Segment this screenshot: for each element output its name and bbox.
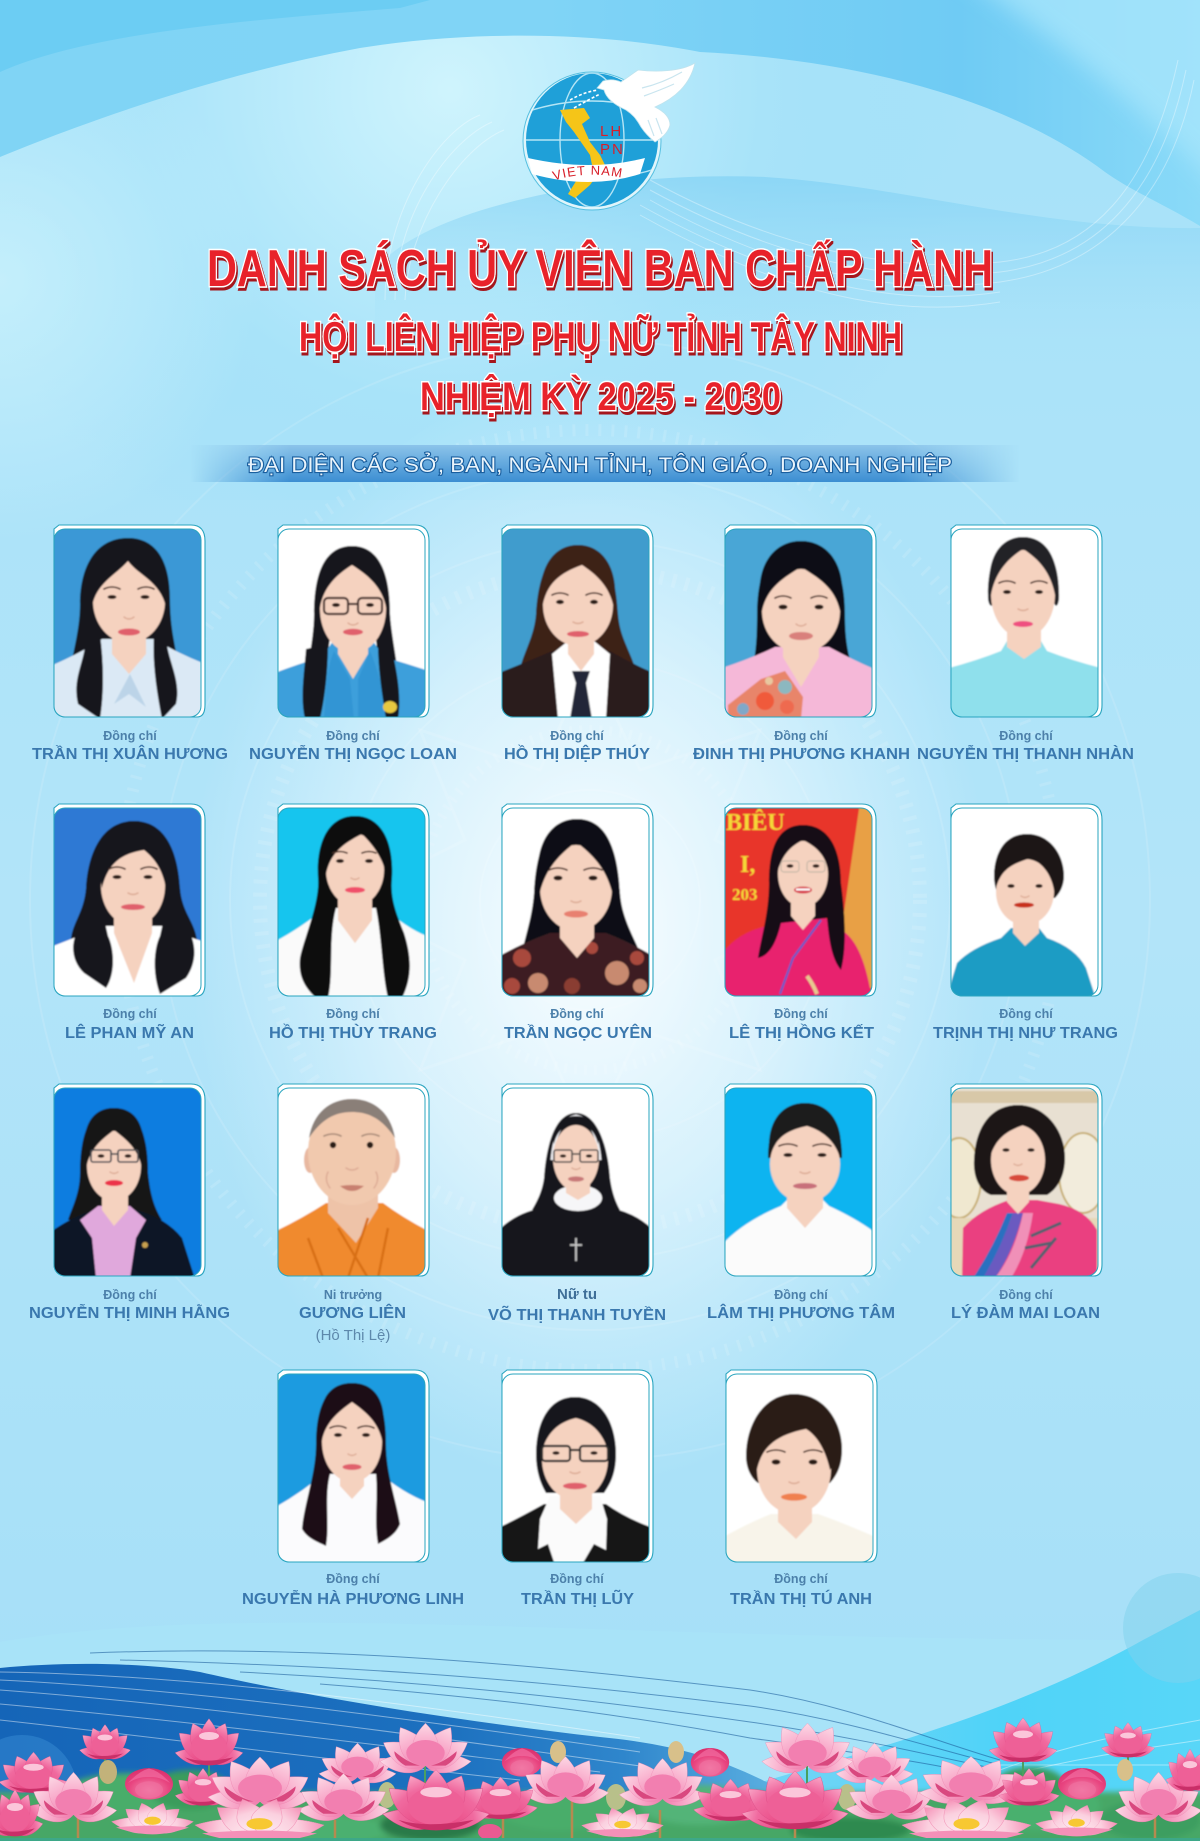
caption: Đồng chí (326, 1007, 380, 1021)
title line 3: NHIỆM KỲ 2025 - 2030 (420, 373, 781, 419)
card: Hồ Thị Thùy Trang (269, 802, 437, 1042)
card: Hồ Thị Diệp Thúy (496, 523, 656, 763)
caption (504, 1007, 652, 1042)
photo (496, 1082, 656, 1282)
caption (488, 1286, 666, 1324)
caption: Đồng chí (326, 729, 380, 743)
photo (48, 802, 208, 1002)
photo (720, 1368, 880, 1568)
card: Nguyễn Hà Phương Linh (242, 1368, 464, 1608)
caption: LÂM THỊ PHƯƠNG TÂM (707, 1303, 895, 1322)
card: Nguyễn Thị Minh Hằng (29, 1082, 230, 1322)
caption: HỒ THỊ THÙY TRANG (269, 1023, 437, 1042)
caption: Đồng chí (999, 1007, 1053, 1021)
caption: LÊ THỊ HỒNG KẾT (729, 1023, 874, 1042)
caption: Đồng chí (550, 1572, 604, 1586)
caption: GƯƠNG LIÊN (299, 1303, 406, 1322)
photo (945, 802, 1105, 1002)
caption (693, 729, 910, 763)
caption (32, 729, 228, 763)
card: Trần Thị Xuân Hương (32, 523, 228, 763)
caption: Đồng chí (774, 1288, 828, 1302)
caption (730, 1572, 872, 1608)
caption (933, 1007, 1118, 1042)
photo (272, 523, 432, 723)
caption: NGUYỄN THỊ THANH NHÀN (917, 744, 1134, 763)
letters LHPN (600, 123, 625, 158)
title line 2: HỘI LIÊN HIỆP PHỤ NỮ TỈNH TÂY NINH (299, 312, 902, 360)
caption (951, 1288, 1100, 1322)
caption: HỒ THỊ DIỆP THÚY (504, 744, 650, 763)
caption: Đồng chí (999, 1288, 1053, 1302)
logo: Vietnam Women's Union emblem: VIET NAM (552, 166, 622, 180)
photo: BIÊU (726, 809, 785, 836)
photo (48, 1082, 208, 1282)
caption: Ni trưởng (324, 1288, 382, 1302)
caption: Đồng chí (326, 1572, 380, 1586)
caption: TRỊNH THỊ NHƯ TRANG (933, 1025, 1118, 1042)
caption: NGUYỄN THỊ NGỌC LOAN (249, 744, 457, 763)
bottom wave decoration (0, 1573, 1200, 1841)
card: Trần Thị Tú Anh (720, 1368, 880, 1608)
card: Đinh Thị Phương Khanh (693, 523, 910, 763)
ribbon (528, 158, 645, 182)
card: Lê Thị Hồng Kết (719, 802, 879, 1042)
caption: LÊ PHAN MỸ AN (65, 1022, 194, 1042)
caption: Đồng chí (774, 1572, 828, 1586)
caption: Đồng chí (999, 729, 1053, 743)
caption: Đồng chí (774, 1007, 828, 1021)
caption (269, 1007, 437, 1042)
caption: NGUYỄN HÀ PHƯƠNG LINH (242, 1589, 464, 1608)
title line 1: DANH SÁCH ỦY VIÊN BAN CHẤP HÀNH (207, 239, 993, 298)
caption (65, 1007, 194, 1042)
caption: Nữ tu (557, 1286, 597, 1303)
caption: LÝ ĐÀM MAI LOAN (951, 1303, 1100, 1322)
caption (917, 729, 1134, 763)
caption: TRẦN THỊ LŨY (521, 1588, 634, 1608)
photo (719, 1082, 879, 1282)
caption (707, 1288, 895, 1322)
lotus flowers and leaves (0, 1718, 1200, 1841)
photo (272, 1368, 432, 1568)
photo (496, 523, 656, 723)
caption (504, 729, 650, 763)
caption: TRẦN THỊ TÚ ANH (730, 1589, 872, 1608)
photo (945, 523, 1105, 723)
photo: I, (740, 852, 755, 878)
photo (496, 1368, 656, 1568)
caption: Đồng chí (550, 1007, 604, 1021)
caption: Đồng chí (103, 729, 157, 743)
caption: ĐINH THỊ PHƯƠNG KHANH (693, 746, 910, 763)
letters LHPN: LH (600, 123, 623, 140)
photo (272, 1082, 432, 1282)
caption (299, 1288, 406, 1344)
card: Nữ tu Võ Thị Thanh Tuyền (488, 1082, 666, 1324)
caption: Đồng chí (774, 729, 828, 743)
card: Lý Đàm Mai Loan (950, 1084, 1103, 1318)
photo: 203 (732, 885, 758, 904)
card: Nguyễn Thị Thanh Nhàn (917, 523, 1134, 763)
section banner (190, 445, 1020, 482)
caption: Đồng chí (550, 729, 604, 743)
caption: TRẦN THỊ XUÂN HƯƠNG (32, 744, 228, 763)
card: Lâm Thị Phương Tâm (707, 1082, 895, 1322)
caption: Đồng chí (103, 1007, 157, 1021)
caption (249, 729, 457, 763)
photo (496, 802, 656, 1002)
section banner: ĐẠI DIỆN CÁC SỞ, BAN, NGÀNH TỈNH, TÔN GIÁO, DOANH NGHIỆP (248, 453, 952, 477)
card: Trần Ngọc Uyên (496, 802, 656, 1042)
caption (729, 1007, 874, 1042)
card: Ni trưởng Gương Liên (272, 1082, 432, 1344)
card: Trịnh Thị Như Trang (933, 802, 1118, 1042)
letters LHPN: PN (600, 141, 625, 158)
caption: (Hồ Thị Lệ) (316, 1327, 390, 1344)
photo (719, 802, 879, 1002)
caption (29, 1288, 230, 1322)
caption (521, 1572, 634, 1608)
caption: TRẦN NGỌC UYÊN (504, 1023, 652, 1042)
photo (719, 523, 879, 723)
photo (950, 1084, 1103, 1276)
photo (272, 802, 432, 1002)
map of Vietnam (560, 108, 605, 198)
card: Trần Thị Lũy (496, 1368, 656, 1608)
caption: VÕ THỊ THANH TUYỀN (488, 1304, 666, 1324)
card: Nguyễn Thị Ngọc Loan (249, 523, 457, 763)
photo (48, 523, 208, 723)
caption: NGUYỄN THỊ MINH HẰNG (29, 1303, 230, 1322)
logo: Vietnam Women's Union emblem (522, 62, 696, 210)
card: Lê Phan Mỹ An (48, 802, 208, 1042)
caption (242, 1572, 464, 1608)
caption: Đồng chí (103, 1288, 157, 1302)
dove (570, 63, 695, 142)
